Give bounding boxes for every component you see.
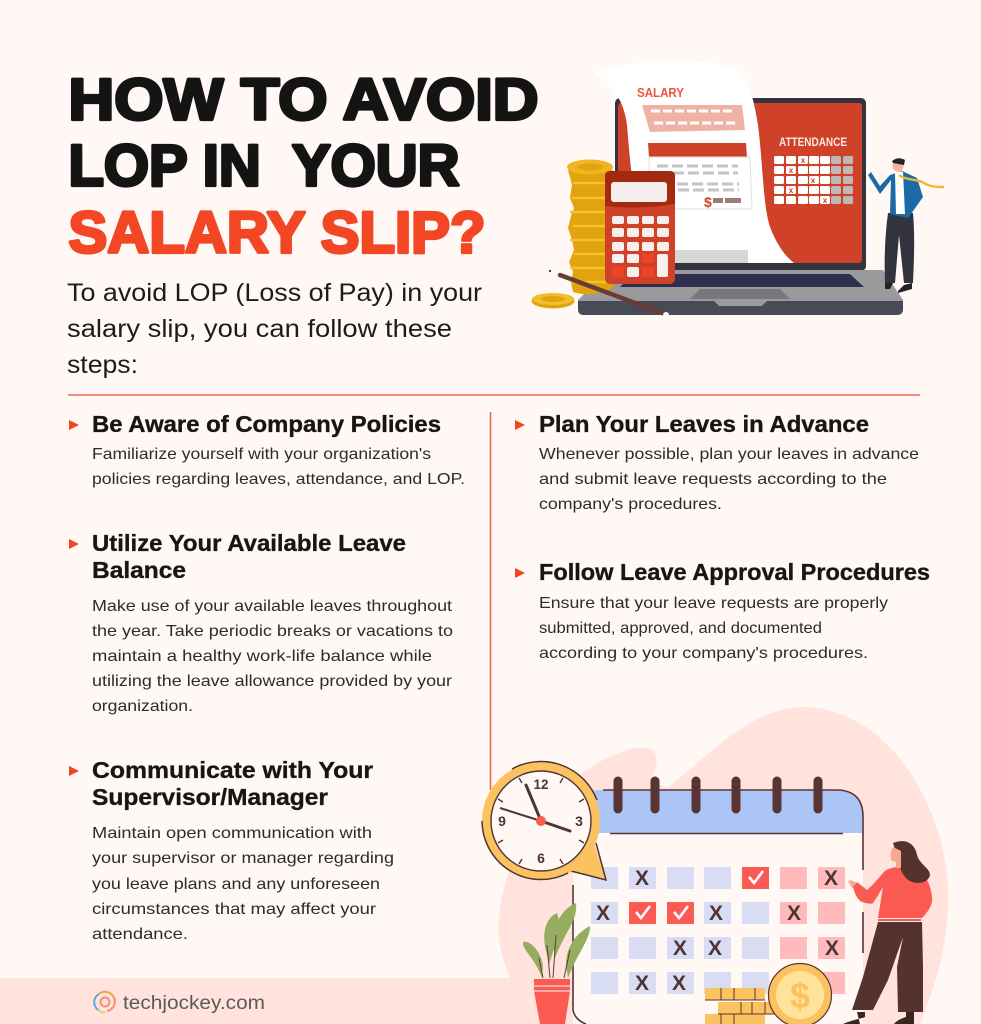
body text: Whenever possible, plan your leaves in advance [539, 446, 919, 463]
body text: Make use of your available leaves throughout [92, 598, 453, 615]
body text [92, 446, 465, 488]
body text: Familiarize yourself with your organization's [92, 446, 431, 463]
bullet [69, 420, 79, 430]
calendar: X [672, 972, 686, 995]
logo [94, 992, 265, 1014]
intro text: To avoid LOP (Loss of Pay) in your [67, 279, 482, 307]
clock: 3 [575, 813, 583, 829]
gold bricks [705, 988, 778, 1024]
heading [92, 757, 373, 810]
body text: company's procedures. [539, 496, 722, 513]
bullet [515, 420, 525, 430]
salary slip paper [595, 61, 794, 263]
calendar: X [824, 867, 838, 890]
body text: circumstances that may affect your [92, 901, 377, 918]
intro text: steps: [67, 351, 138, 379]
title: LOP IN YOUR [68, 134, 460, 198]
clock [482, 762, 606, 880]
logo icon [94, 992, 115, 1012]
dollar coin [768, 964, 832, 1024]
intro text [67, 279, 482, 379]
body text: utilizing the leave allowance provided by your [92, 673, 453, 690]
section: utilize your available leave balance [69, 530, 453, 715]
body text: submitted, approved, and documented [539, 620, 822, 637]
heading [92, 530, 406, 583]
section: be aware of company policies [69, 411, 465, 488]
calendar: X [635, 972, 649, 995]
body text [539, 595, 888, 662]
body text: your supervisor or manager regarding [92, 850, 394, 867]
calendar: X [825, 937, 839, 960]
potted plant [523, 903, 590, 1024]
coin stack [532, 160, 613, 308]
body text: attendance. [92, 926, 188, 943]
businessman [868, 158, 944, 293]
heading: Follow Leave Approval Procedures [539, 559, 930, 585]
calendar cells [591, 867, 769, 994]
body text: the year. Take periodic breaks or vacations to [92, 623, 453, 640]
heading: Plan Your Leaves in Advance [539, 411, 869, 437]
section: follow leave approval procedures [515, 559, 930, 662]
calendar: X [635, 867, 649, 890]
calendar [573, 781, 863, 1024]
body text: and submit leave requests according to the [539, 471, 887, 488]
heading: Supervisor/Manager [92, 784, 328, 810]
heading: Utilize Your Available Leave [92, 530, 406, 556]
calendar: X [596, 902, 610, 925]
salary slip paper: SALARY [637, 86, 685, 100]
body text: organization. [92, 698, 193, 715]
body text [92, 598, 453, 715]
woman [843, 841, 932, 1024]
calendar: X [787, 902, 801, 925]
vertical divider [490, 412, 492, 790]
clock: 9 [498, 813, 506, 829]
footer band [0, 978, 540, 1024]
horizontal divider [68, 394, 920, 396]
heading: Be Aware of Company Policies [92, 411, 441, 437]
heading: Communicate with Your [92, 757, 373, 783]
intro text: salary slip, you can follow these [67, 315, 452, 343]
clock: 6 [537, 850, 545, 866]
salary slip paper: $ [704, 194, 712, 210]
section: plan your leaves in advance [515, 411, 919, 513]
bullet [69, 539, 79, 549]
background blob [498, 707, 948, 1024]
calendar: X [709, 902, 723, 925]
calendar rings [618, 781, 818, 809]
attendance grid: ATTENDANCE [779, 137, 847, 149]
calendar: X [673, 937, 687, 960]
illustration: calendar scene [482, 707, 948, 1024]
calculator [605, 171, 675, 284]
clock: 12 [534, 776, 549, 792]
body text: Maintain open communication with [92, 825, 372, 842]
body text: policies regarding leaves, attendance, and LOP. [92, 471, 465, 488]
title [68, 68, 538, 266]
attendance grid [774, 137, 853, 205]
section: communicate with your supervisor [69, 757, 394, 943]
heading: Balance [92, 557, 186, 583]
body text: maintain a healthy work-life balance while [92, 648, 432, 665]
laptop base [578, 270, 903, 315]
dollar coin: $ [790, 975, 810, 1016]
logo text: techjockey.com [123, 993, 265, 1014]
body text [539, 446, 919, 513]
attendance grid: x [789, 166, 794, 175]
pencil [549, 270, 669, 318]
attendance grid: x [801, 156, 806, 165]
illustration: laptop with salary slip [532, 61, 944, 318]
title: SALARY SLIP? [68, 200, 486, 266]
body text [92, 825, 394, 943]
body text: according to your company's procedures. [539, 645, 868, 662]
body text: Ensure that your leave requests are properly [539, 595, 888, 612]
body text: you leave plans and any unforeseen [92, 876, 380, 893]
calendar: X [708, 937, 722, 960]
attendance grid: x [823, 196, 828, 205]
title: HOW TO AVOID [68, 68, 538, 132]
bullet [69, 766, 79, 776]
bullet [515, 568, 525, 578]
attendance grid: x [789, 186, 794, 195]
attendance grid: x [811, 176, 816, 185]
laptop screen [615, 98, 866, 271]
